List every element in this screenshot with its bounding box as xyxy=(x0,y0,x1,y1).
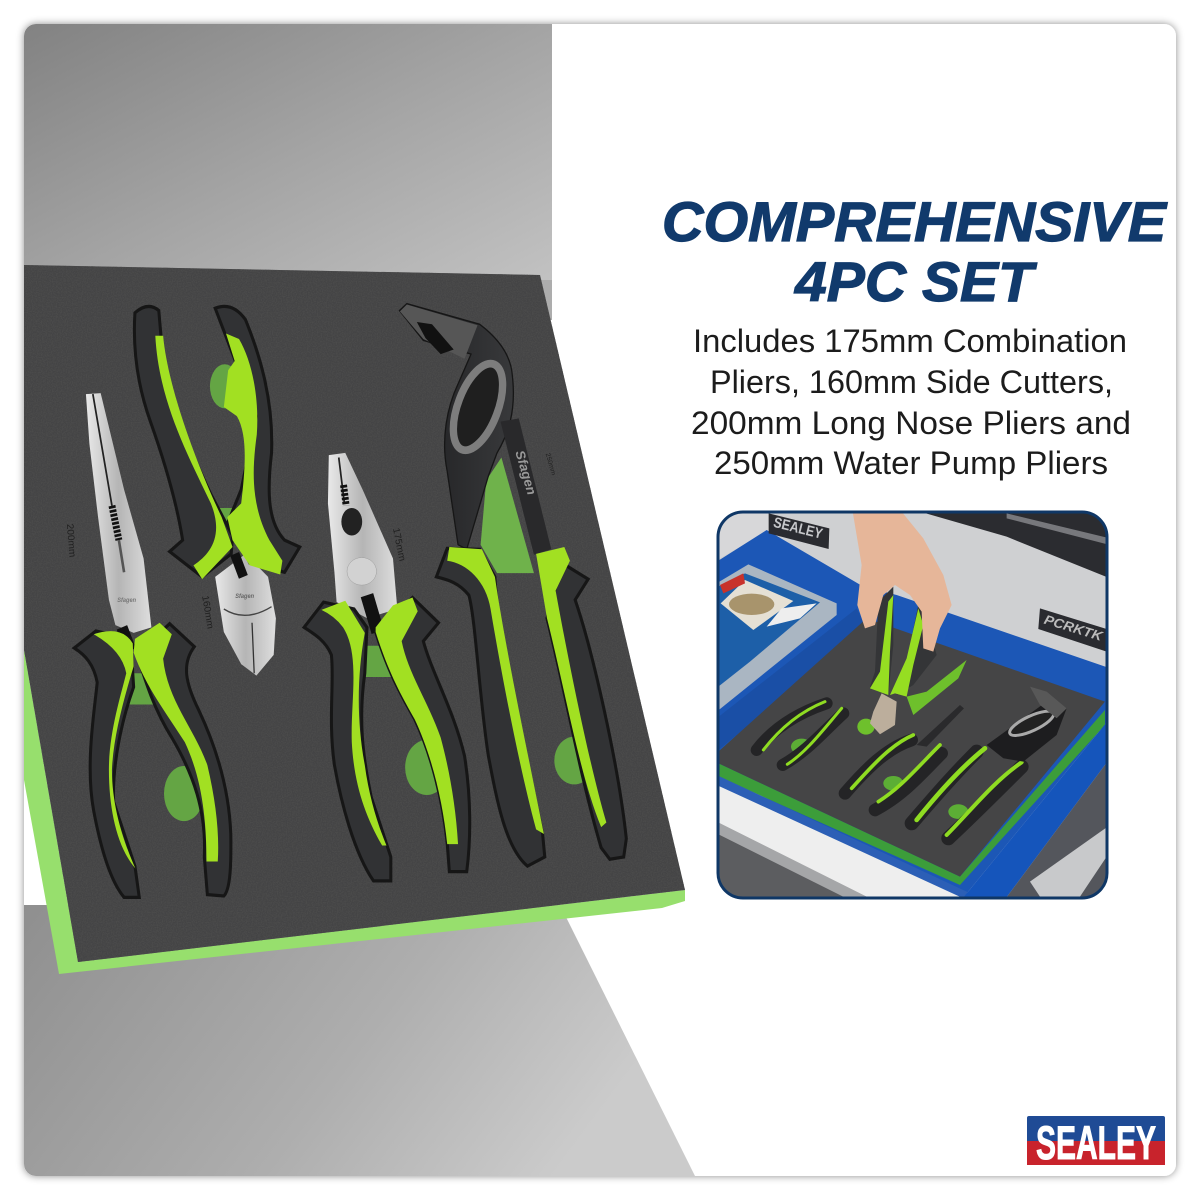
tool: water pump pliers: Sfagen xyxy=(512,448,539,497)
description text: 200mm Long Nose Pliers and xyxy=(691,405,1131,441)
tool: side cutters: Sfagen xyxy=(235,594,254,600)
heading xyxy=(662,190,1168,313)
size labels debossed in foam: 175mm xyxy=(390,527,407,562)
product photo: foam tray with four pliers xyxy=(24,265,689,974)
insert tools xyxy=(757,660,1067,838)
tool: combination pliers xyxy=(304,453,470,881)
heading: 4PC SET xyxy=(794,250,1038,313)
size labels debossed in foam: 200mm xyxy=(64,523,77,558)
tool: water pump pliers xyxy=(399,304,626,866)
cabinet dark top panel xyxy=(926,514,1106,576)
drawer front white face xyxy=(720,786,960,896)
size labels debossed in foam: 160mm xyxy=(199,595,215,630)
foam tray top xyxy=(24,265,689,965)
heading: COMPREHENSIVE xyxy=(662,190,1168,253)
drawer blue body xyxy=(717,530,1110,902)
hand xyxy=(853,512,952,652)
description text: Pliers, 160mm Side Cutters, xyxy=(710,364,1113,400)
tool: long nose pliers: Sfagen xyxy=(117,598,137,604)
description text xyxy=(691,323,1131,481)
plate: brand: PCRKTK xyxy=(1042,612,1106,644)
pliers drawn in zoom coordinates xyxy=(64,304,626,897)
description text: 250mm Water Pump Pliers xyxy=(714,445,1108,481)
tool: side cutters xyxy=(134,306,300,676)
cutters in hand xyxy=(870,587,937,734)
tool: water pump pliers: 250mm xyxy=(544,452,557,477)
plate: brand xyxy=(1038,608,1107,652)
size labels debossed in foam xyxy=(64,523,407,630)
inset photo: tools in drawer xyxy=(717,512,1110,902)
drawer side blue xyxy=(964,724,1106,896)
plate: SEALEY: SEALEY xyxy=(772,515,824,543)
foam insert top xyxy=(718,618,1105,877)
parts organiser box xyxy=(717,564,837,712)
drawer divider rail xyxy=(717,608,867,750)
tool: long nose pliers xyxy=(74,393,231,897)
foam cut-outs showing green base xyxy=(128,364,594,821)
foam tray green side xyxy=(24,650,685,974)
foam insert side xyxy=(718,710,1105,885)
description text: Includes 175mm Combination xyxy=(693,323,1127,359)
